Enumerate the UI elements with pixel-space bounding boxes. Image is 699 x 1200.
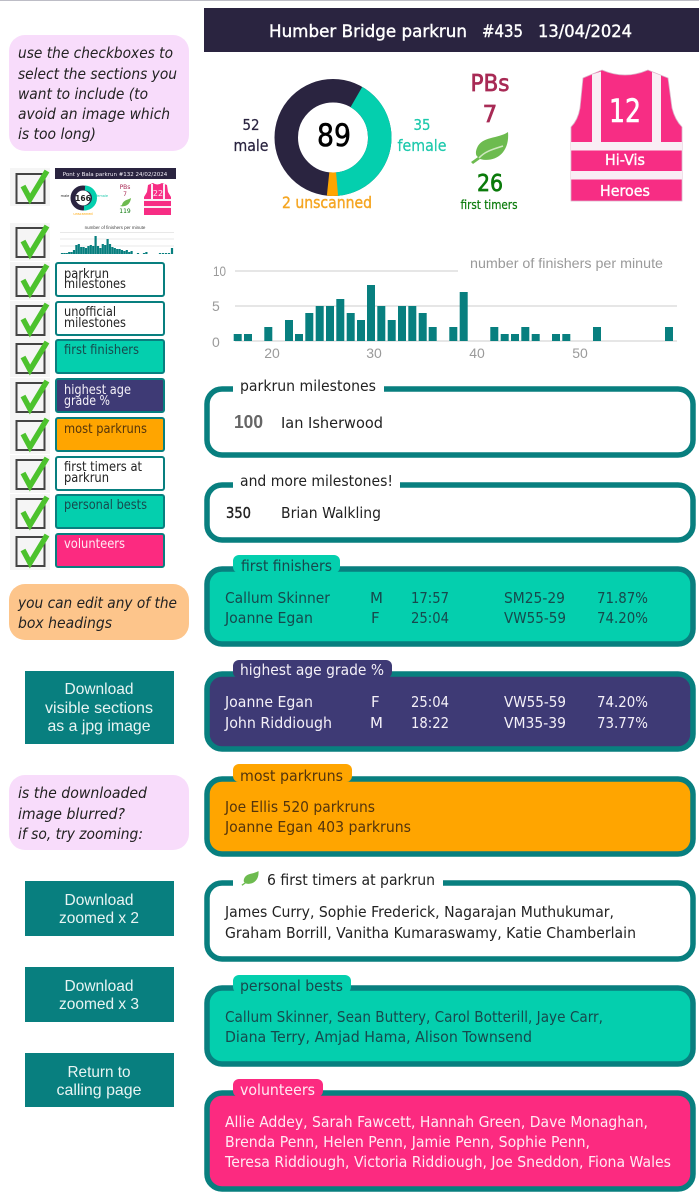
panel: and more milestones: and more milestones! bbox=[240, 472, 393, 490]
checkbox and label: highest age grade: grade % bbox=[64, 394, 110, 409]
panel: volunteers bbox=[207, 1079, 693, 1189]
donut chart: finishers by gender: 35 bbox=[414, 116, 430, 134]
thumbnail: summary section: 119 bbox=[119, 208, 131, 215]
button: download zoomed x 3: Download bbox=[64, 978, 134, 995]
bar chart: number of finishers per minute: 20 bbox=[264, 345, 280, 361]
icon: small leaf bbox=[241, 871, 259, 886]
PBs and first timers stats: first timers bbox=[460, 198, 518, 212]
panel: volunteers: Allie Addey, Sarah Fawcett, Hannah Green, Dave Monaghan, bbox=[225, 1113, 648, 1131]
panel: first finishers bbox=[207, 555, 693, 644]
panel: highest age grade: F bbox=[371, 693, 380, 711]
left column: instructions and controls bbox=[9, 35, 189, 1107]
button: return to calling page: calling page bbox=[56, 1082, 142, 1099]
checkbox: chart section bbox=[10, 223, 50, 261]
donut chart: finishers by gender: 52 bbox=[242, 116, 260, 134]
donut chart: finishers by gender: male bbox=[234, 136, 268, 155]
button: return to calling page bbox=[25, 1053, 174, 1107]
panel: first finishers: 71.87% bbox=[597, 589, 648, 607]
panel: highest age grade: John Riddiough bbox=[224, 714, 332, 732]
panel: and more milestones: Brian Walkling bbox=[281, 504, 381, 522]
panel: parkrun milestones bbox=[207, 377, 693, 455]
panel: and more milestones bbox=[207, 472, 693, 540]
panel: first finishers: first finishers bbox=[241, 557, 332, 575]
panel: highest age grade: VW55-59 bbox=[504, 693, 566, 711]
button: download zoomed x 2: Download bbox=[64, 892, 134, 909]
panel: first finishers: SM25-29 bbox=[504, 589, 565, 607]
checkbox and label: personal bests bbox=[10, 494, 164, 532]
icon: hi-vis vest with volunteers count: 12 bbox=[609, 92, 641, 130]
checkbox and label: parkrun milestones: milestones bbox=[64, 277, 126, 292]
bar chart: number of finishers per minute: 5 bbox=[212, 298, 220, 314]
panel: most parkruns: most parkruns bbox=[240, 767, 343, 785]
instruction bubble: checkboxes: use the checkboxes to bbox=[18, 44, 173, 62]
checkbox and label: volunteers bbox=[10, 532, 164, 570]
instruction bubble: checkboxes: select the sections you bbox=[18, 65, 177, 83]
title bar: 13/04/2024 bbox=[538, 22, 632, 42]
donut chart: finishers by gender: female bbox=[398, 136, 446, 155]
thumbnail: summary section: Pont y Bala parkrun #132 24/02/2024 bbox=[63, 172, 168, 178]
instruction bubble: checkboxes bbox=[9, 35, 189, 151]
checkbox and label: parkrun milestones bbox=[10, 262, 164, 300]
instruction bubble: edit headings: you can edit any of the bbox=[17, 594, 177, 612]
thumbnail: summary section bbox=[55, 168, 176, 216]
checkbox and label: first timers: first timers at bbox=[64, 460, 142, 475]
title bar: Humber Bridge parkrun bbox=[269, 22, 467, 42]
title bar: #435 bbox=[482, 22, 523, 42]
checkbox and label: volunteers: volunteers bbox=[64, 537, 125, 552]
checkbox and label: unofficial milestones: unofficial bbox=[64, 305, 116, 320]
panel: parkrun milestones: parkrun milestones bbox=[240, 377, 376, 395]
checkbox and label: parkrun milestones: parkrun bbox=[64, 267, 109, 282]
checkbox and label: personal bests: personal bests bbox=[64, 498, 147, 513]
donut chart: finishers by gender bbox=[234, 74, 446, 212]
instruction bubble: edit headings: box headings bbox=[18, 614, 112, 632]
button: download zoomed x 2 bbox=[25, 881, 174, 936]
instruction bubble: blurred image: image blurred? bbox=[18, 805, 125, 823]
title bar bbox=[204, 8, 699, 52]
thumbnail: summary section: PBs bbox=[120, 184, 130, 191]
panel: highest age grade: 25:04 bbox=[411, 693, 449, 711]
panel: volunteers: Brenda Penn, Helen Penn, Jamie Penn, Sophie Penn, bbox=[225, 1133, 590, 1151]
panel: personal bests bbox=[207, 975, 693, 1064]
thumbnail: summary section: 166 bbox=[75, 194, 91, 203]
button: download zoomed x 3: zoomed x 3 bbox=[59, 996, 139, 1013]
panel: highest age grade: VM35-39 bbox=[504, 714, 566, 732]
panel: and more milestones: 350 bbox=[226, 504, 251, 522]
icon: hi-vis vest with volunteers count: Hi-Vis bbox=[605, 151, 645, 169]
panel: most parkruns: Joanne Egan 403 parkruns bbox=[224, 818, 411, 836]
bar chart: number of finishers per minute bbox=[212, 255, 677, 361]
instruction bubble: blurred image: if so, try zooming: bbox=[18, 825, 143, 843]
instruction bubble: blurred image bbox=[9, 775, 189, 850]
icon: hi-vis vest with volunteers count: Heroes bbox=[600, 182, 650, 200]
thumbnail: summary section: unscanned bbox=[73, 212, 93, 216]
icon: 100 milestone badge: 100 bbox=[234, 412, 263, 432]
panel: first finishers: 25:04 bbox=[411, 609, 449, 627]
panel: first finishers: Joanne Egan bbox=[224, 609, 313, 627]
button: download zoomed x 2: zoomed x 2 bbox=[59, 910, 139, 927]
panel: highest age grade: M bbox=[370, 714, 383, 732]
bar chart: number of finishers per minute: 0 bbox=[212, 334, 220, 350]
panel: most parkruns: Joe Ellis 520 parkruns bbox=[224, 798, 375, 816]
panel: highest age grade: 18:22 bbox=[411, 714, 449, 732]
panel: first finishers: Callum Skinner bbox=[225, 589, 331, 607]
thumbnail: chart section bbox=[60, 225, 174, 254]
panel: highest age grade: Joanne Egan bbox=[224, 693, 313, 711]
PBs and first timers stats: PBs bbox=[470, 71, 510, 97]
donut chart: finishers by gender: 2 unscanned bbox=[282, 193, 372, 212]
panel: first timers at parkrun: James Curry, Sophie Frederick, Nagarajan Muthukumar, bbox=[224, 903, 614, 921]
bar chart: number of finishers per minute: 50 bbox=[572, 345, 588, 361]
checkbox and label: first finishers: first finishers bbox=[64, 343, 139, 358]
panel: personal bests: Diana Terry, Amjad Hama, Alison Townsend bbox=[225, 1028, 532, 1046]
button: download zoomed x 3 bbox=[25, 967, 174, 1022]
panel: highest age grade bbox=[207, 660, 693, 749]
thumbnail: summary section: female bbox=[96, 194, 108, 198]
panel: first timers at parkrun bbox=[207, 871, 693, 959]
panel: personal bests: Callum Skinner, Sean Buttery, Carol Botterill, Jaye Carr, bbox=[225, 1008, 603, 1026]
panel: most parkruns bbox=[207, 764, 693, 854]
button: download visible sections: Download bbox=[64, 681, 134, 698]
checkbox and label: highest age grade bbox=[10, 378, 164, 416]
icon: hi-vis vest with volunteers count bbox=[571, 70, 682, 201]
panel: parkrun milestones: Ian Isherwood bbox=[281, 414, 383, 432]
PBs and first timers stats: 7 bbox=[483, 102, 497, 128]
checkbox and label: unofficial milestones bbox=[10, 301, 164, 339]
checkbox and label: unofficial milestones: milestones bbox=[64, 316, 126, 331]
checkbox: summary section bbox=[10, 168, 50, 206]
panel: volunteers: Teresa Riddiough, Victoria Riddiough, Joe Sneddon, Fiona Wales bbox=[224, 1153, 671, 1171]
button: download visible sections bbox=[25, 671, 174, 744]
bar chart: number of finishers per minute: 10 bbox=[213, 263, 226, 279]
button: return to calling page: Return to bbox=[68, 1064, 131, 1081]
panel: highest age grade: 74.20% bbox=[597, 693, 648, 711]
instruction bubble: checkboxes: is too long) bbox=[18, 125, 96, 143]
PBs and first timers stats: 26 bbox=[477, 171, 503, 197]
panel: volunteers: volunteers bbox=[240, 1081, 315, 1099]
panel: first finishers: 17:57 bbox=[411, 589, 449, 607]
thumbnail: summary section: male bbox=[61, 194, 69, 198]
donut chart: finishers by gender: 89 bbox=[317, 118, 351, 154]
bar chart: number of finishers per minute: 40 bbox=[469, 345, 485, 361]
checkbox and label: first finishers bbox=[10, 339, 164, 377]
button: download visible sections: visible sections bbox=[45, 700, 153, 717]
icon: leaf bbox=[471, 132, 508, 164]
instruction bubble: blurred image: is the downloaded bbox=[18, 784, 147, 802]
checkbox and label: most parkruns: most parkruns bbox=[64, 422, 147, 437]
PBs and first timers stats bbox=[460, 71, 518, 212]
thumbnail: summary section: 22 bbox=[153, 189, 163, 198]
instruction bubble: checkboxes: avoid an image which bbox=[18, 105, 170, 123]
instruction bubble: checkboxes: want to include (to bbox=[18, 85, 148, 103]
panel: first timers at parkrun: 6 first timers at parkrun bbox=[267, 871, 435, 889]
panel: first timers at parkrun: Graham Borrill, Vanitha Kumaraswamy, Katie Chamberlain bbox=[225, 924, 636, 942]
panel: highest age grade: 73.77% bbox=[597, 714, 648, 732]
button: download visible sections: as a jpg image bbox=[48, 718, 151, 735]
panel: first finishers: M bbox=[370, 589, 383, 607]
panel: first finishers: F bbox=[371, 609, 380, 627]
thumbnail: chart section: number of finishers per minute bbox=[85, 225, 146, 230]
checkbox and label: first timers bbox=[10, 455, 164, 493]
bar chart: number of finishers per minute: 30 bbox=[366, 345, 382, 361]
instruction bubble: edit headings bbox=[9, 584, 189, 640]
panel: first finishers: VW55-59 bbox=[504, 609, 566, 627]
checkbox and label: first timers: parkrun bbox=[64, 471, 109, 486]
panel: personal bests: personal bests bbox=[240, 977, 343, 995]
checkbox and label: most parkruns bbox=[10, 416, 164, 454]
panel: first finishers: 74.20% bbox=[597, 609, 648, 627]
bar chart: number of finishers per minute: number of finishers per minute bbox=[470, 255, 663, 271]
thumbnail: summary section: 7 bbox=[123, 191, 127, 198]
panel: highest age grade: highest age grade % bbox=[240, 661, 384, 679]
checkbox and label: highest age grade: highest age bbox=[64, 383, 131, 398]
